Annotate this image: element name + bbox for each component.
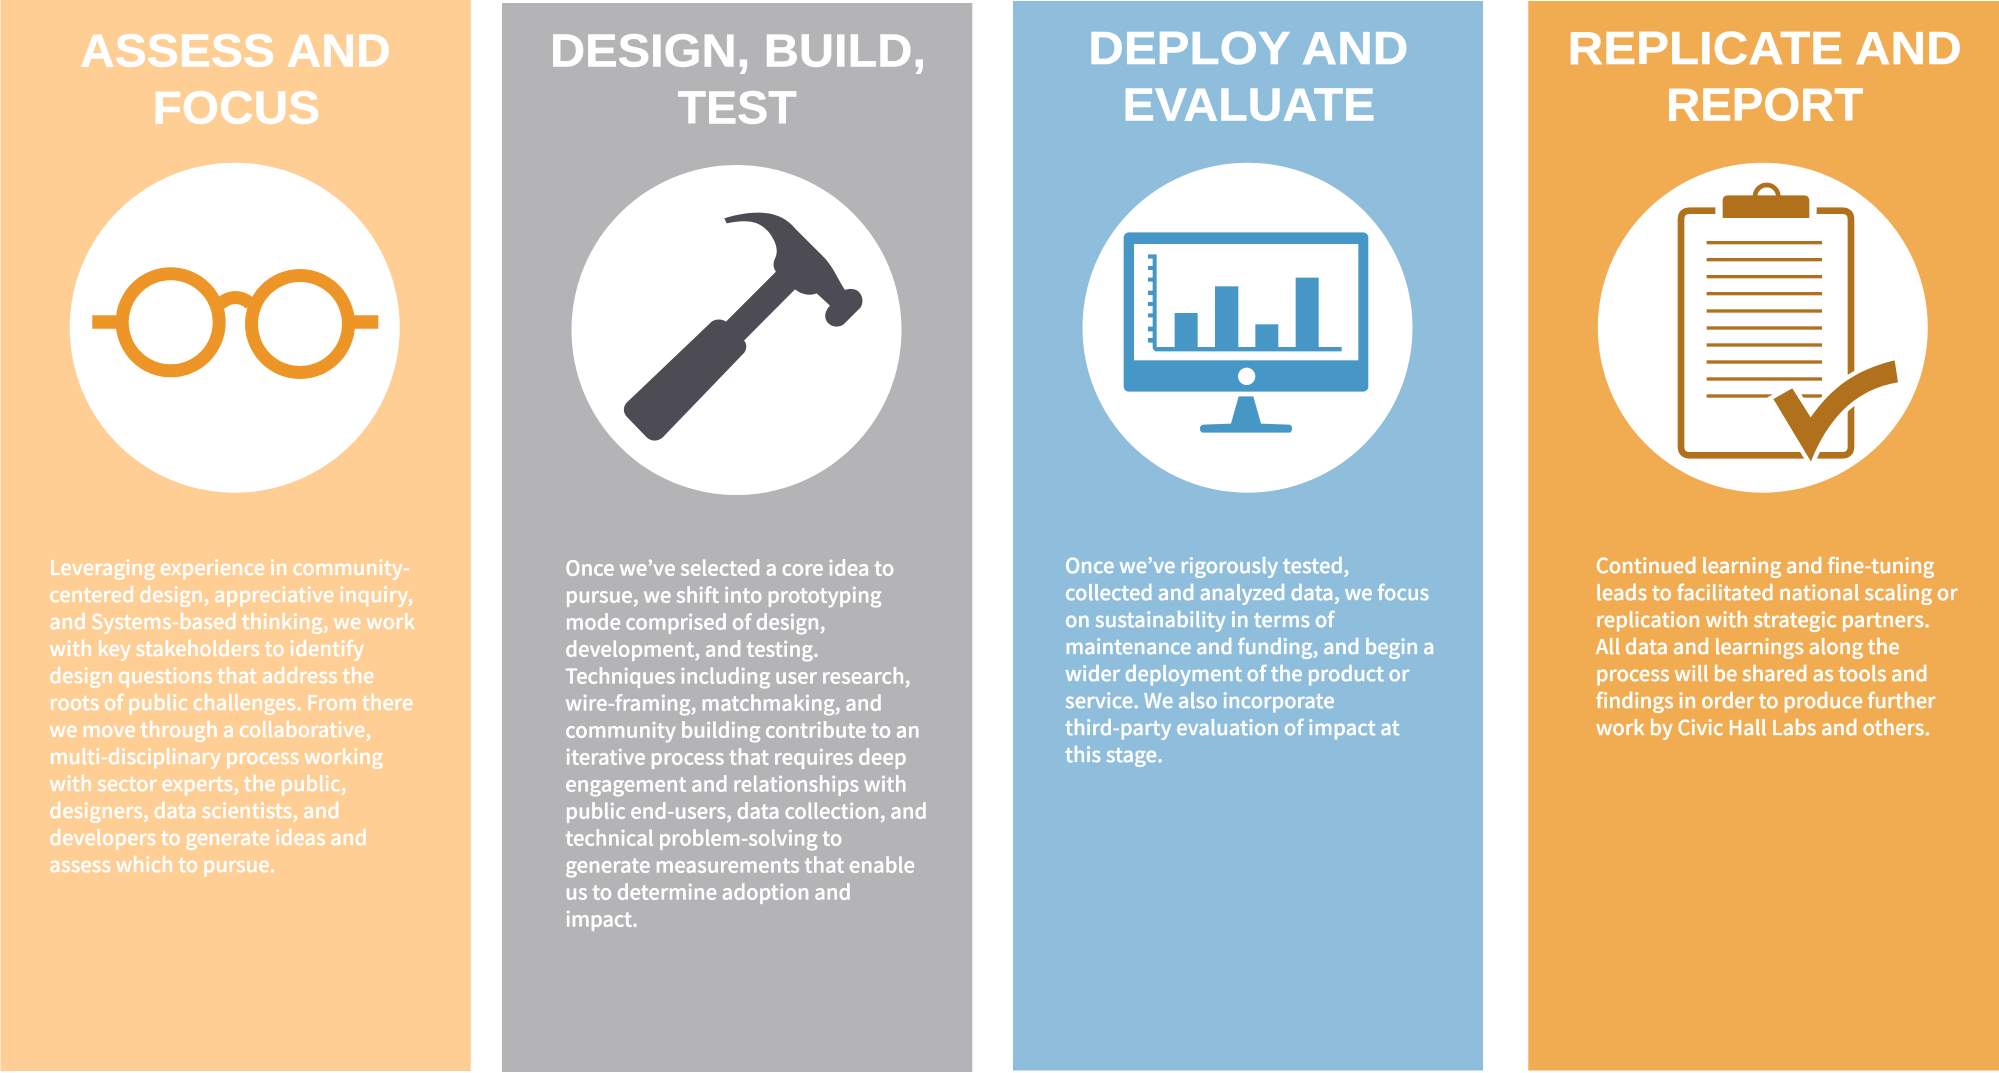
- body text: assess and focus: design questions that address the: [49, 659, 374, 689]
- heading: replicate and report: [1568, 22, 1962, 131]
- body text: assess and focus: we move through a collaborative,: [49, 713, 371, 743]
- body text: design, build, test: iterative process that requires deep: [565, 741, 907, 771]
- body text: deploy and evaluate: service. We also incorporate: [1065, 684, 1335, 714]
- panel: replicate and report: [1528, 1, 1999, 1070]
- panel: design, build, test: [502, 3, 972, 1072]
- body text: replicate and report: leads to facilitated national scaling or: [1596, 576, 1958, 606]
- body text: assess and focus: and Systems-based thinking, we work: [49, 605, 415, 635]
- heading: design, build, test: TEST: [678, 81, 797, 133]
- body text: deploy and evaluate: on sustainability in terms of: [1065, 603, 1335, 633]
- heading: replicate and report: REPORT: [1666, 79, 1863, 131]
- body text: assess and focus: roots of public challenges. From there: [49, 686, 413, 716]
- body text: deploy and evaluate: third-party evaluation of impact at: [1065, 711, 1400, 741]
- body text: design, build, test: pursue, we shift into prototyping: [565, 579, 882, 609]
- body text: design, build, test: [565, 552, 927, 933]
- panel: deploy and evaluate: [1013, 1, 1483, 1070]
- body text: design, build, test: wire-framing, matchmaking, and: [565, 687, 882, 717]
- heading: replicate and report: REPLICATE AND: [1568, 22, 1962, 74]
- body text: design, build, test: Once we’ve selected a core idea to: [565, 552, 894, 582]
- heading: deploy and evaluate: EVALUATE: [1123, 79, 1375, 131]
- body text: deploy and evaluate: wider deployment of the product or: [1065, 657, 1410, 687]
- body text: assess and focus: centered design, appreciative inquiry,: [49, 578, 413, 608]
- body text: design, build, test: technical problem-solving to: [565, 822, 842, 852]
- body text: assess and focus: designers, data scientists, and: [49, 794, 340, 824]
- body text: replicate and report: [1596, 549, 1958, 741]
- body text: deploy and evaluate: this stage.: [1065, 738, 1163, 768]
- body text: assess and focus: developers to generate ideas and: [49, 821, 367, 851]
- body text: design, build, test: development, and testing.: [565, 633, 819, 663]
- body text: design, build, test: generate measurements that enable: [565, 849, 915, 879]
- icon: hammer: [624, 213, 862, 441]
- body text: design, build, test: Techniques including user research,: [565, 660, 911, 690]
- body text: deploy and evaluate: Once we’ve rigorously tested,: [1065, 549, 1349, 579]
- body text: assess and focus: Leveraging experience in community-: [49, 551, 410, 581]
- body text: design, build, test: impact.: [565, 903, 638, 933]
- body text: deploy and evaluate: [1065, 549, 1435, 768]
- heading: deploy and evaluate: DEPLOY AND: [1088, 22, 1408, 74]
- icon circle: clipboard: [1598, 163, 1928, 493]
- body text: replicate and report: findings in order to produce further: [1596, 684, 1936, 714]
- icon circle: monitor: [1082, 163, 1412, 493]
- icon circle: hammer: [572, 165, 902, 495]
- body text: assess and focus: with sector experts, the public,: [49, 767, 347, 797]
- heading: assess and focus: [80, 25, 391, 133]
- heading: design, build, test: DESIGN, BUILD,: [550, 25, 926, 77]
- body text: assess and focus: assess which to pursue.: [49, 848, 276, 878]
- body text: replicate and report: replication with strategic partners.: [1596, 603, 1930, 633]
- body text: deploy and evaluate: maintenance and funding, and begin a: [1065, 630, 1435, 660]
- body text: design, build, test: public end-users, data collection, and: [565, 795, 927, 825]
- icon: monitor with bar chart: [1124, 232, 1368, 433]
- icon: glasses: [92, 274, 378, 372]
- panel: assess and focus: [0, 0, 471, 1071]
- body text: replicate and report: work by Civic Hall Labs and others.: [1596, 711, 1930, 741]
- body text: design, build, test: mode comprised of design,: [565, 606, 826, 636]
- body text: deploy and evaluate: collected and analyzed data, we focus: [1065, 576, 1430, 606]
- body text: design, build, test: engagement and relationships with: [565, 768, 907, 798]
- body text: assess and focus: with key stakeholders to identify: [49, 632, 364, 662]
- body text: assess and focus: [49, 551, 415, 878]
- heading: assess and focus: ASSESS AND: [80, 25, 391, 77]
- heading: design, build, test: [550, 25, 926, 133]
- body text: design, build, test: us to determine adoption and: [565, 876, 851, 906]
- icon circle: glasses: [70, 163, 400, 493]
- body text: replicate and report: process will be shared as tools and: [1596, 657, 1928, 687]
- body text: design, build, test: community building contribute to an: [565, 714, 920, 744]
- body text: assess and focus: multi-disciplinary process working: [49, 740, 383, 770]
- icon: clipboard with check mark: [1681, 185, 1898, 462]
- heading: deploy and evaluate: [1088, 22, 1408, 131]
- body text: replicate and report: All data and learnings along the: [1596, 630, 1900, 660]
- body text: replicate and report: Continued learning and fine-tuning: [1596, 549, 1935, 579]
- heading: assess and focus: FOCUS: [153, 81, 320, 133]
